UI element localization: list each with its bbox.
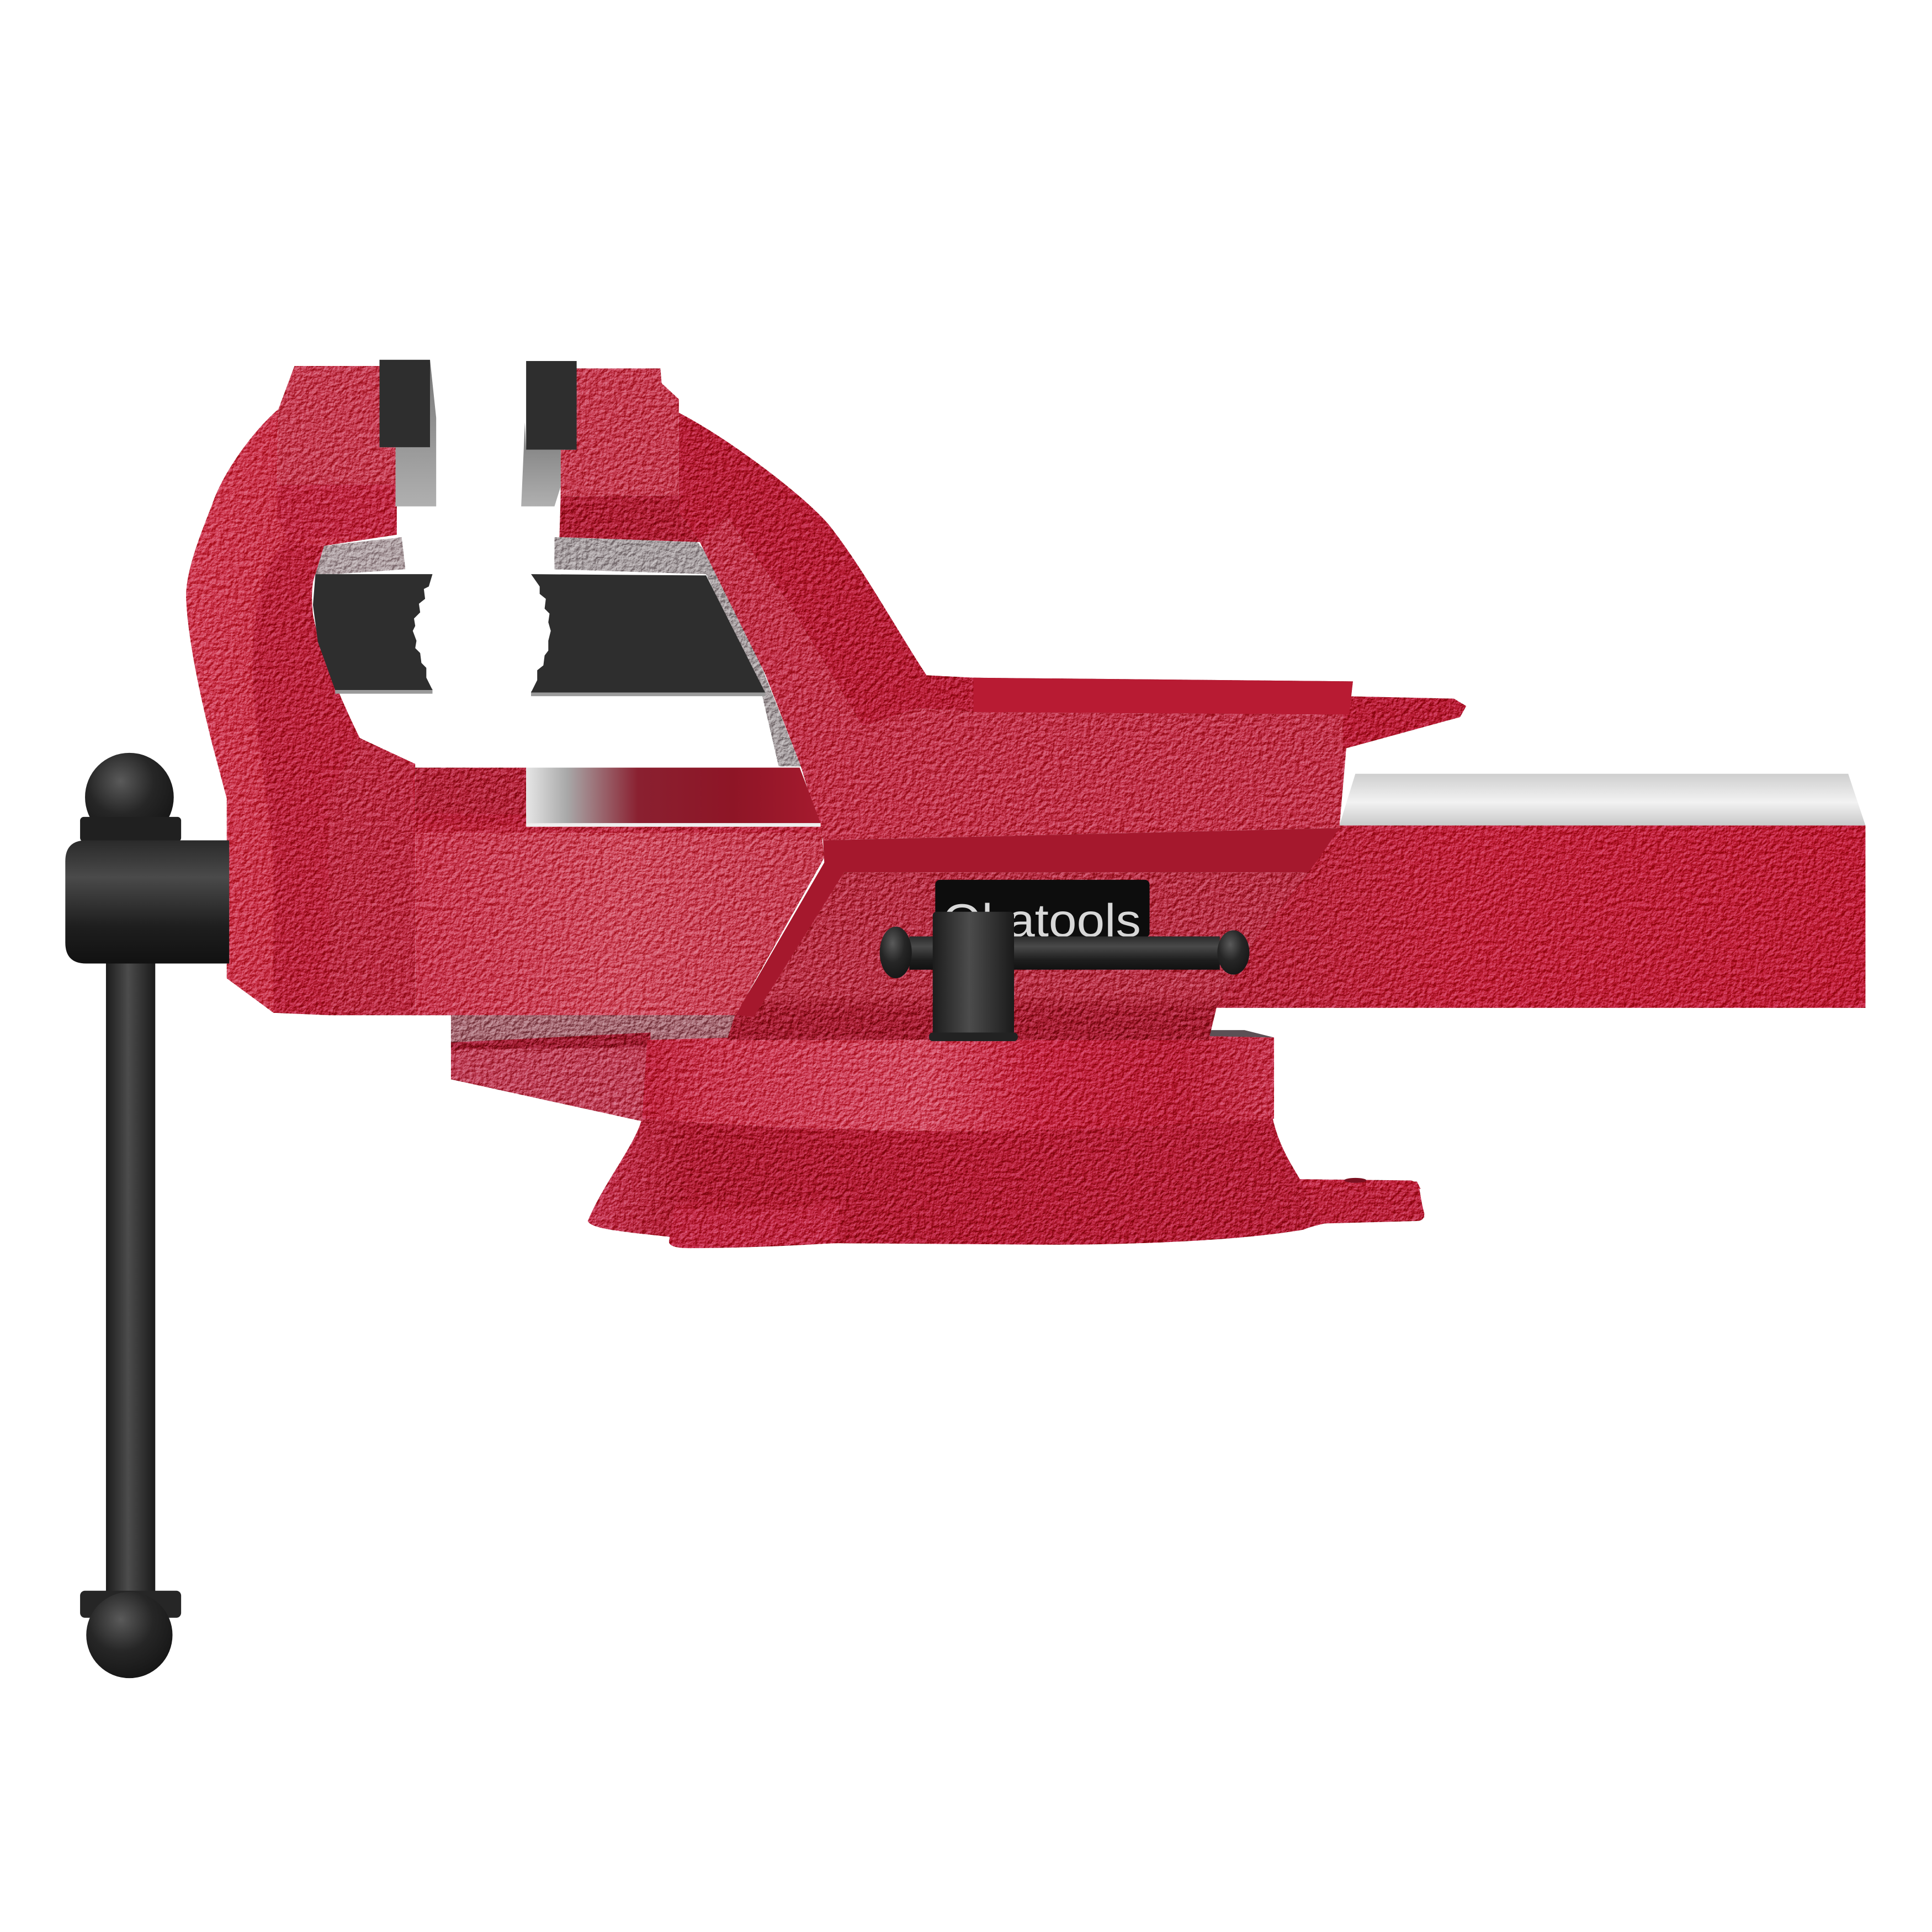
- front jaw arm: [186, 409, 415, 1015]
- vise body and jaws casting: [186, 366, 1466, 1040]
- base cylinder: [642, 1034, 1274, 1131]
- logo plate: [935, 880, 1149, 936]
- casting seam: [328, 738, 415, 1015]
- base lower cone and mounting lugs: [588, 1119, 1424, 1248]
- swivel base: [588, 1030, 1424, 1248]
- front jaw underside: [277, 484, 397, 540]
- lower pipe jaws: [313, 574, 765, 692]
- body front face: [415, 823, 824, 1015]
- front slide plate: [526, 768, 821, 827]
- base hole right: [1344, 1178, 1366, 1183]
- under rail: [451, 1010, 764, 1124]
- logo plate: Okatools: [943, 894, 1141, 946]
- rear jaw underside: [559, 495, 700, 542]
- anvil top face: [973, 678, 1353, 715]
- jaw insert supports: [335, 360, 765, 696]
- swivel lock handle: [880, 912, 1249, 1041]
- grey underside of rear jaw: [554, 537, 801, 766]
- front jaw block: [277, 366, 396, 484]
- arm inner shade: [253, 540, 360, 1015]
- rear slide bar: [1183, 774, 1865, 1008]
- rear jaw block: [561, 368, 679, 497]
- body dark band: [736, 828, 1339, 1017]
- upper jaw inserts: [380, 360, 577, 450]
- illustration: red bench vise: [65, 360, 1866, 1678]
- rail stub: [415, 768, 526, 826]
- rear jaw arm: [679, 413, 1353, 727]
- body lower face: [727, 872, 1309, 1040]
- main screw handle: [65, 753, 229, 1678]
- body upper face: [700, 518, 1349, 840]
- base rim top: [1201, 1030, 1274, 1045]
- anvil horn: [1343, 696, 1466, 749]
